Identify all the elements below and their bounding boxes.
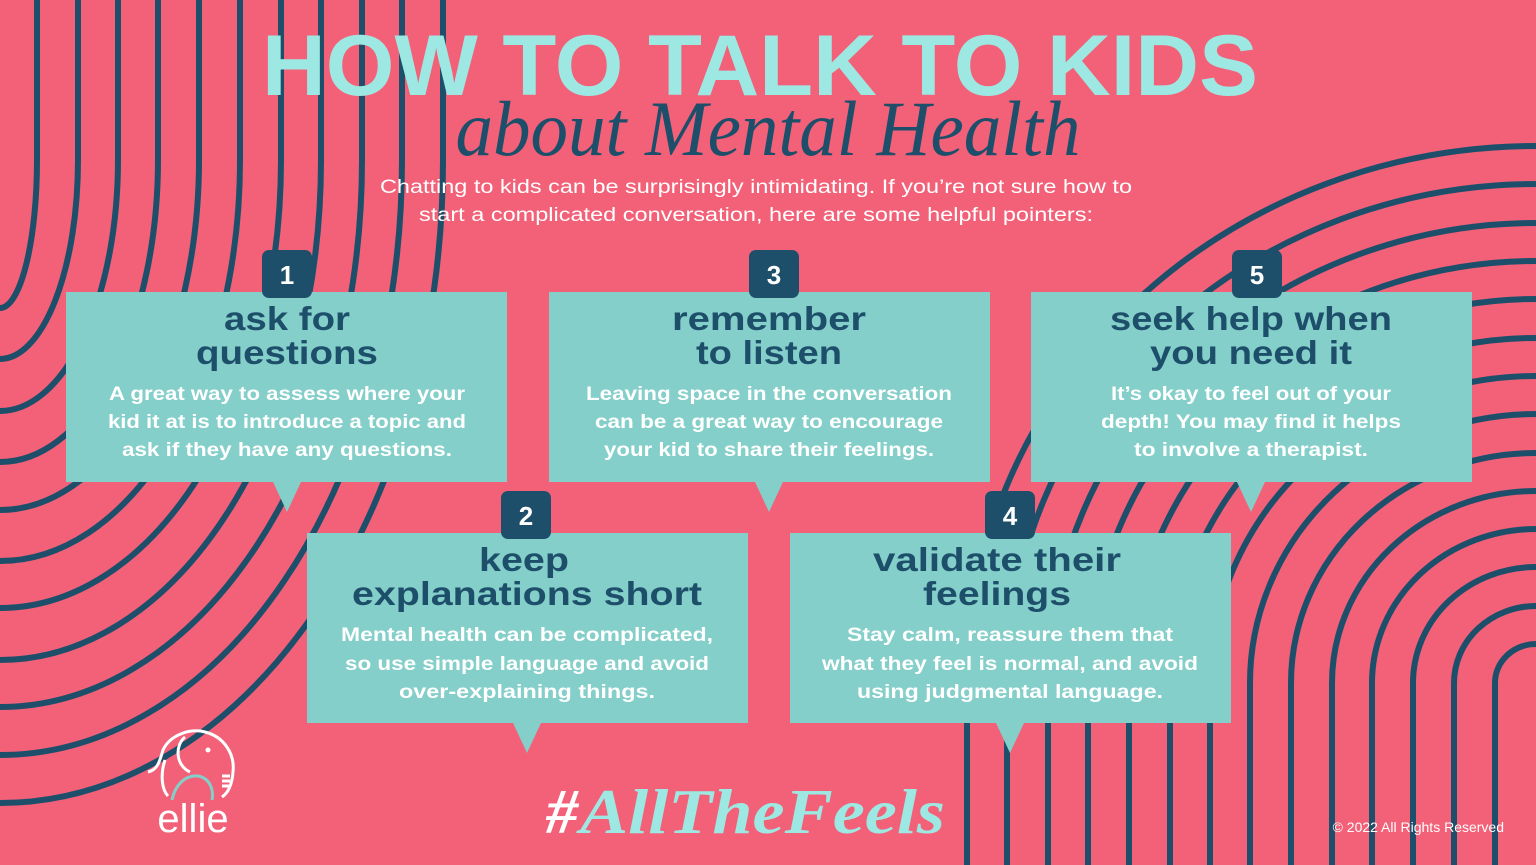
- logo: ellie elephant: ellie: [157, 797, 229, 841]
- panel: 2 keep explanations short: so use simple language and avoid: [345, 654, 709, 675]
- panel: 5 seek help: depth! You may find it helps: [1101, 412, 1401, 433]
- title: HOW TO TALK TO KIDS: [262, 18, 1258, 114]
- panel: 5 seek help: [1031, 250, 1472, 512]
- logo: ellie elephant: [148, 731, 233, 841]
- panel: 3 remember to listen: can be a great way to encourage: [595, 412, 943, 433]
- decorative line pattern right: [967, 146, 1536, 865]
- intro text: start a complicated conversation, here are some helpful pointers:: [419, 205, 1093, 226]
- panel: 5 seek help: 5: [1250, 260, 1264, 290]
- panel: 4 validate their feelings: validate their: [873, 541, 1121, 578]
- panel: 4 validate their feelings: Stay calm, reassure them that: [847, 625, 1174, 646]
- panel: 2 keep explanations short: [307, 491, 748, 753]
- panel: 2 keep explanations short: Mental health can be complicated,: [341, 625, 713, 646]
- panel: 2 keep explanations short: over-explaining things.: [399, 682, 655, 703]
- panel: 1 ask for questions: 1: [280, 260, 294, 290]
- panel: 1 ask for questions: questions: [196, 334, 378, 371]
- panel: 4 validate their feelings: feelings: [923, 575, 1071, 612]
- panel: 2 keep explanations short: keep: [479, 541, 569, 578]
- panel: 1 ask for questions: kid it at is to introduce a topic and: [108, 412, 466, 433]
- panel: 1 ask for questions: [66, 250, 507, 512]
- panel: 2 keep explanations short: explanations short: [352, 575, 702, 612]
- panel: 1 ask for questions: ask if they have any questions.: [122, 440, 452, 461]
- panel: 3 remember to listen: 3: [767, 260, 781, 290]
- panel: 4 validate their feelings: 4: [1003, 501, 1018, 531]
- panel: 3 remember to listen: Leaving space in the conversation: [586, 384, 952, 405]
- intro text: [380, 177, 1132, 226]
- panel: 1 ask for questions: ask for: [224, 300, 350, 337]
- intro text: Chatting to kids can be surprisingly intimidating. If you’re not sure how to: [380, 177, 1132, 198]
- subtitle script: about Mental Health: [456, 85, 1080, 172]
- panel: 5 seek help: you need it: [1150, 334, 1352, 371]
- hashtag: #: [545, 776, 580, 847]
- panel: 5 seek help: It’s okay to feel out of your: [1111, 384, 1392, 405]
- hashtag: AllTheFeels: [575, 776, 945, 847]
- panel: 5 seek help: seek help when: [1110, 300, 1392, 337]
- panel: 3 remember to listen: remember: [672, 300, 866, 337]
- panel: 3 remember to listen: your kid to share their feelings.: [604, 440, 934, 461]
- panel: 3 remember to listen: to listen: [696, 334, 842, 371]
- panel: 1 ask for questions: A great way to assess where your: [109, 384, 466, 405]
- decorative line pattern left: [0, 0, 443, 803]
- panel: 4 validate their feelings: what they feel is normal, and avoid: [821, 654, 1198, 675]
- copyright: © 2022 All Rights Reserved: [1333, 819, 1504, 835]
- panel: 3 remember to listen: [549, 250, 990, 512]
- panel: 5 seek help: to involve a therapist.: [1134, 440, 1368, 461]
- panel: 2 keep explanations short: 2: [519, 501, 533, 531]
- panel: 4 validate their feelings: [790, 491, 1231, 753]
- panel: 4 validate their feelings: using judgmental language.: [857, 682, 1163, 703]
